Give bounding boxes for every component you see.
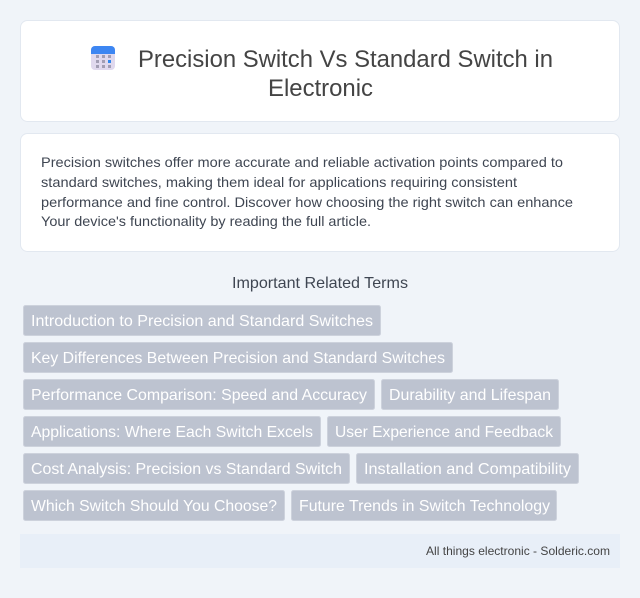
tag: User Experience and Feedback [335, 424, 554, 441]
tag [382, 380, 558, 410]
panel: header [20, 20, 620, 122]
panel: summary [20, 134, 620, 252]
tag [356, 454, 578, 484]
footer [20, 534, 620, 568]
text block: summary paragraph: Precision switches offer more accurate and reliable activation points compared to [41, 154, 563, 170]
tag [24, 490, 284, 520]
tag: Key Differences Between Precision and Standard Switches [31, 350, 445, 367]
tag: Introduction to Precision and Standard Switches [31, 313, 373, 330]
title [138, 46, 553, 102]
tag: Durability and Lifespan [389, 387, 551, 404]
title: Precision Switch Vs Standard Switch in [138, 46, 553, 73]
tag [24, 342, 452, 372]
tag: Performance Comparison: Speed and Accuracy [31, 387, 367, 404]
text block: summary paragraph: Your device's functionality by reading the full article. [41, 213, 371, 229]
tag [24, 454, 350, 484]
title: Electronic [268, 75, 373, 102]
tag: Installation and Compatibility [364, 461, 571, 478]
tag [328, 416, 560, 446]
tag: Applications: Where Each Switch Excels [31, 424, 313, 441]
tag: Future Trends in Switch Technology [299, 498, 550, 515]
heading: related terms: Important Related Terms [232, 275, 408, 292]
tag: Cost Analysis: Precision vs Standard Switch [31, 461, 342, 478]
tag [24, 380, 374, 410]
footer: All things electronic - Solderic.com [426, 544, 610, 558]
text block: summary paragraph: standard switches, making them ideal for applications requiring consistent [41, 174, 517, 190]
panel: term tags [24, 306, 578, 520]
tag [24, 306, 380, 336]
icon: calendar grid [91, 46, 115, 70]
tag [292, 490, 556, 520]
text block: summary paragraph: performance and fine control. Discover how choosing the right switch can enhance [41, 194, 573, 210]
tag [24, 416, 320, 446]
text block: summary paragraph [41, 154, 573, 229]
tag: Which Switch Should You Choose? [31, 498, 277, 515]
